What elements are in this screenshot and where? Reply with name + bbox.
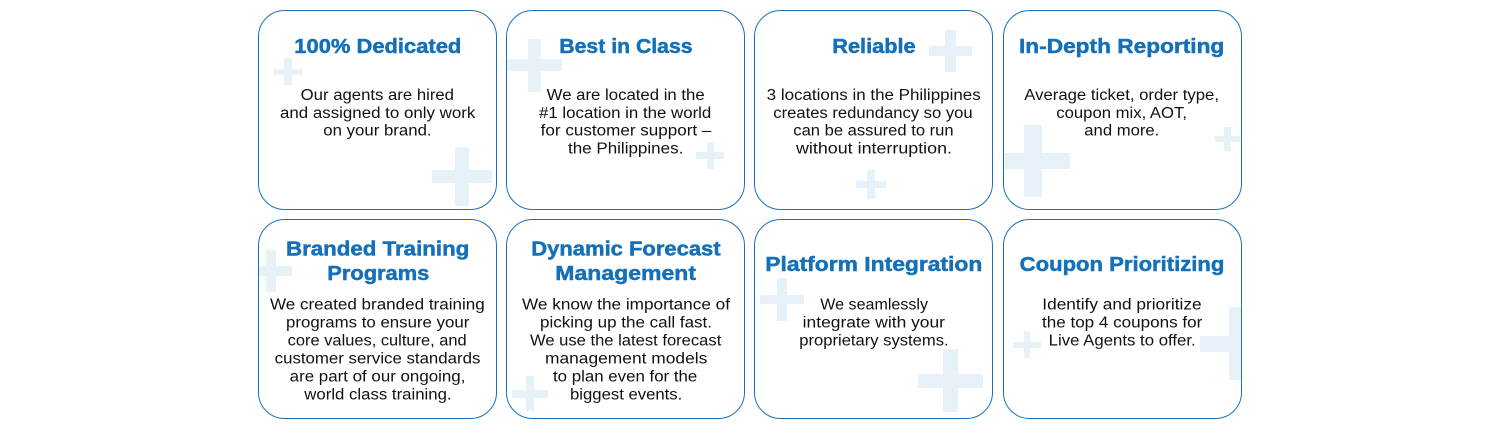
text block: dedicated description: and assigned to only work bbox=[280, 105, 476, 122]
text block: training description: core values, culture, and bbox=[288, 332, 467, 349]
heading: Dynamic Forecast Management: Management bbox=[555, 262, 696, 285]
text block: best in class description bbox=[539, 87, 712, 158]
text block: coupon description: the top 4 coupons for bbox=[1042, 314, 1202, 331]
text block: training description: are part of our ongoing, bbox=[290, 368, 465, 385]
text block: forecast description: biggest events. bbox=[570, 386, 682, 403]
heading: Reliable: Reliable bbox=[832, 35, 916, 58]
text block: forecast description: We use the latest forecast bbox=[530, 332, 722, 349]
text block: reliable description bbox=[767, 87, 981, 158]
text block: dedicated description: on your brand. bbox=[323, 122, 432, 140]
heading: Platform Integration: Platform Integration bbox=[765, 253, 982, 276]
heading: Branded Training Programs: Branded Training bbox=[286, 238, 469, 260]
text block: integration description: integrate with your bbox=[803, 314, 945, 331]
text block: coupon description: Live Agents to offer. bbox=[1049, 332, 1196, 349]
text block: reporting description: Average ticket, order type, bbox=[1024, 87, 1219, 104]
heading: Branded Training Programs: Programs bbox=[327, 262, 429, 285]
text block: reporting description bbox=[1024, 87, 1219, 140]
text block: forecast description: We know the importance of bbox=[522, 296, 731, 313]
text block: training description bbox=[270, 296, 485, 403]
text block: forecast description: to plan even for the bbox=[553, 368, 697, 385]
panel: Branded Training Programs bbox=[258, 220, 496, 418]
heading: In-Depth Reporting: In-Depth Reporting bbox=[1019, 35, 1224, 58]
text block: forecast description bbox=[522, 296, 731, 403]
text block: forecast description: picking up the call fast. bbox=[540, 314, 712, 331]
heading: Best in Class: Best in Class bbox=[559, 35, 693, 58]
heading: Branded Training Programs bbox=[286, 238, 469, 285]
text block: reliable description: creates redundancy so you bbox=[773, 105, 973, 122]
text block: training description: world class training. bbox=[303, 386, 452, 403]
text block: best in class description: We are located in the bbox=[547, 87, 705, 104]
panel: Reliable bbox=[754, 10, 992, 210]
heading: 100% Dedicated: 100% Dedicated bbox=[294, 35, 461, 58]
panel: Platform Integration bbox=[754, 220, 992, 418]
text block: reliable description: 3 locations in the Philippines bbox=[767, 87, 981, 104]
panel: 100% Dedicated bbox=[258, 10, 496, 210]
text block: coupon description: Identify and prioritize bbox=[1042, 296, 1202, 313]
text block: best in class description: #1 location in the world bbox=[539, 105, 711, 122]
text block: reporting description: coupon mix, AOT, bbox=[1056, 105, 1187, 122]
panel: Coupon Prioritizing bbox=[1004, 220, 1242, 418]
text block: training description: customer service standards bbox=[275, 350, 481, 367]
text block: integration description: We seamlessly bbox=[820, 296, 928, 313]
text block: best in class description: the Philippines. bbox=[568, 140, 683, 158]
text block: training description: We created branded training bbox=[270, 296, 485, 313]
text block: forecast description: management models bbox=[545, 350, 708, 367]
panel: In-Depth Reporting bbox=[1004, 10, 1242, 210]
text block: dedicated description: Our agents are hired bbox=[301, 87, 454, 104]
text block: reliable description: can be assured to run bbox=[793, 122, 954, 140]
text block: reliable description: without interruption. bbox=[795, 140, 952, 158]
text block: best in class description: for customer support – bbox=[541, 122, 712, 140]
text block: coupon description bbox=[1042, 296, 1202, 349]
text block: training description: programs to ensure your bbox=[286, 314, 469, 331]
heading: Dynamic Forecast Management bbox=[531, 238, 721, 285]
text block: reporting description: and more. bbox=[1084, 122, 1159, 140]
text block: integration description: proprietary systems. bbox=[799, 332, 949, 349]
heading: Coupon Prioritizing: Coupon Prioritizing bbox=[1020, 253, 1224, 276]
panel: Best in Class bbox=[506, 10, 744, 210]
heading: Dynamic Forecast Management: Dynamic Forecast bbox=[531, 238, 721, 260]
panel: Dynamic Forecast Management bbox=[506, 220, 744, 418]
text block: dedicated description bbox=[280, 87, 476, 140]
text block: integration description bbox=[799, 296, 949, 349]
